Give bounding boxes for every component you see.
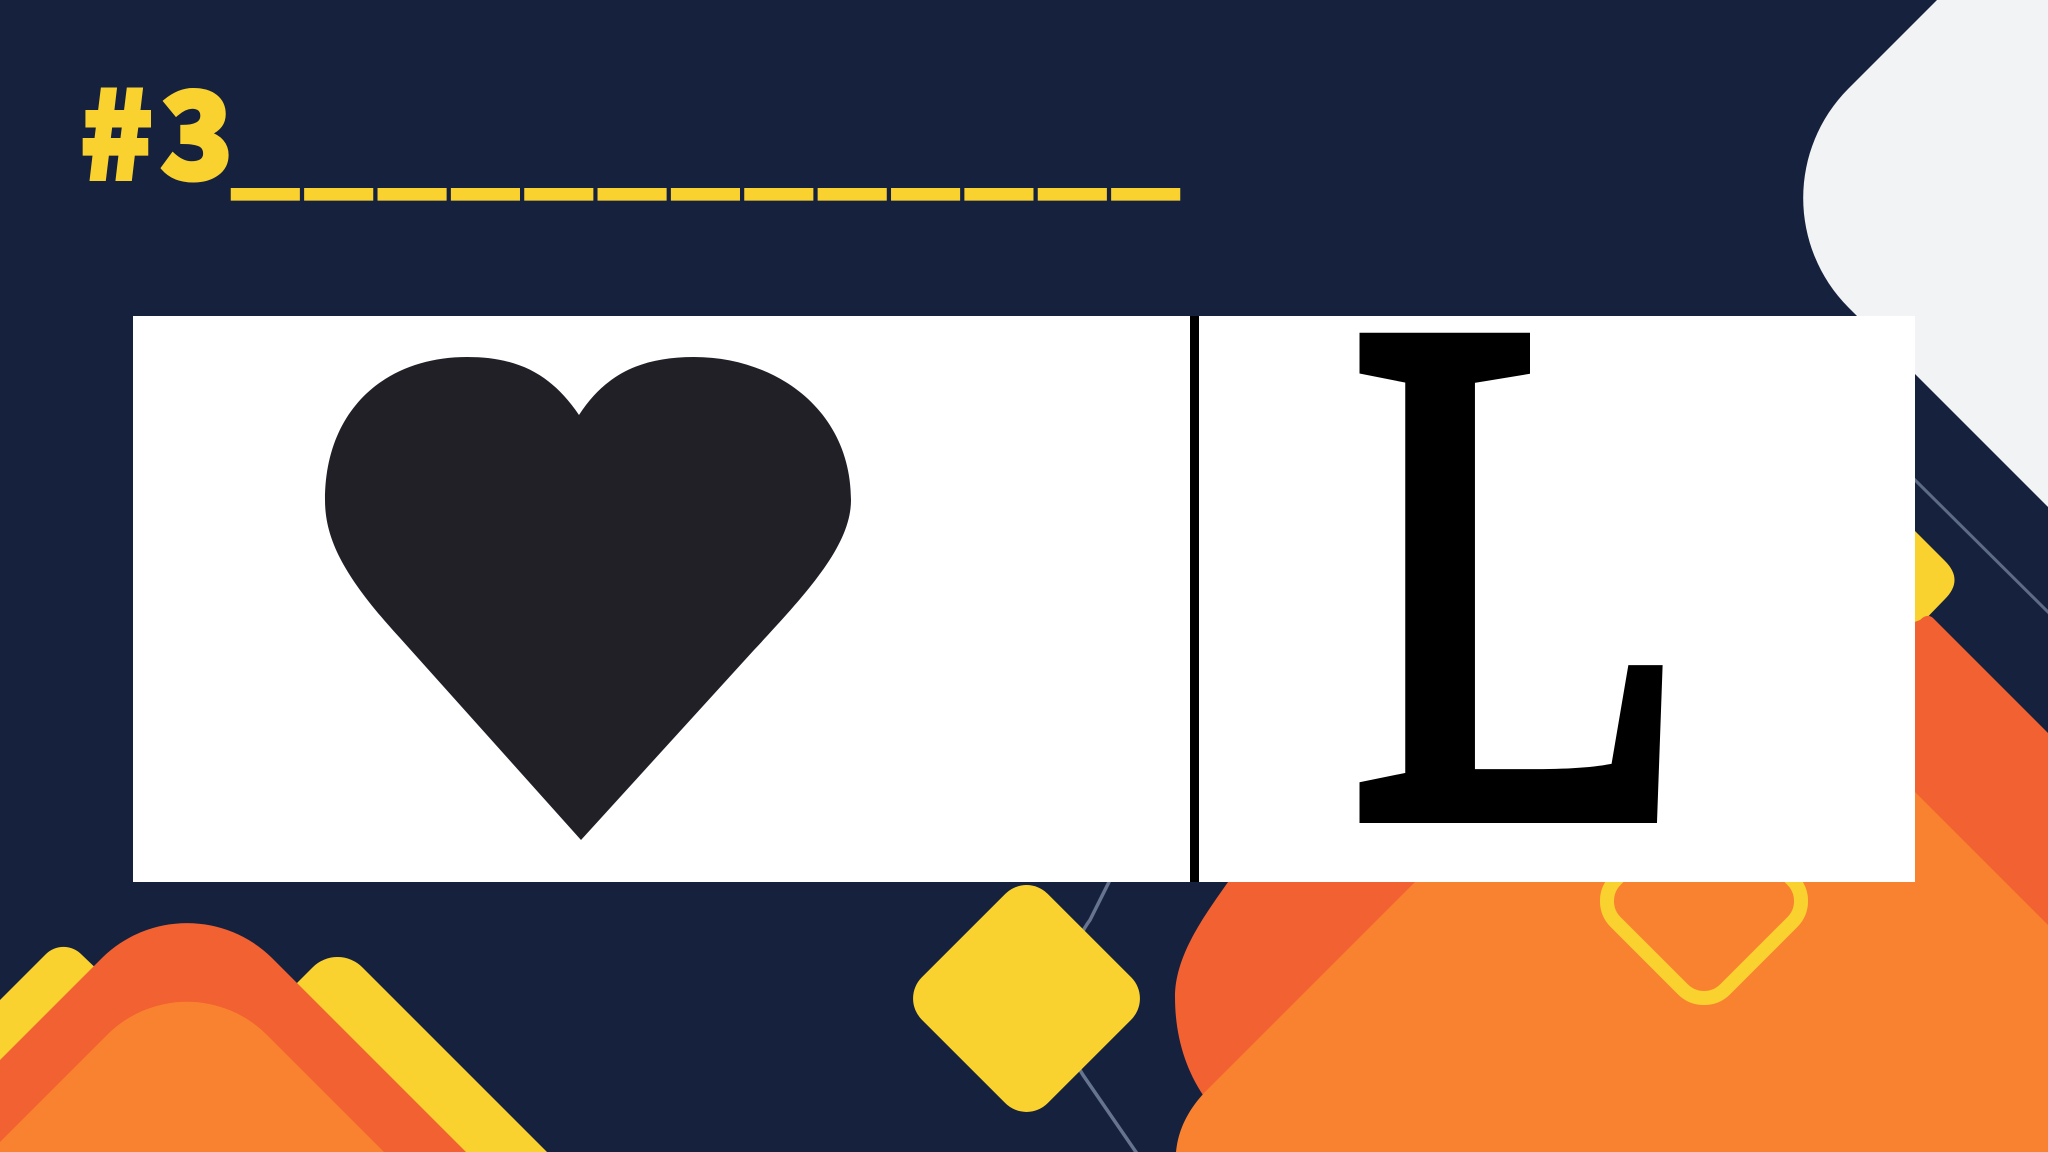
bottom left mountain group bbox=[0, 923, 547, 1152]
left yellow peak bbox=[0, 947, 150, 1152]
yellow filled diamond bbox=[901, 873, 1152, 1124]
icon: heart bbox=[325, 357, 851, 840]
red-orange peak bbox=[0, 923, 466, 1152]
title: #3 with blank underline bbox=[80, 33, 1182, 217]
orange peak bbox=[0, 1002, 384, 1152]
background shape: bottom right orange mass bbox=[1176, 587, 2048, 1152]
title number: #3 bbox=[80, 40, 240, 214]
letter L: L bbox=[1353, 177, 1686, 966]
yellow outlined diamond bbox=[1595, 792, 1813, 1010]
panel: image strip bbox=[133, 177, 1915, 966]
right yellow peak bbox=[250, 957, 547, 1152]
panel: letter image background bbox=[1199, 316, 1915, 882]
background line: top right thin diagonal bbox=[1912, 477, 2048, 614]
panel: heart image background bbox=[133, 316, 1190, 882]
background shape: bottom right red-orange mass bbox=[1175, 616, 2048, 1152]
background shape: right yellow diamond bbox=[1850, 496, 1954, 630]
thin curved line behind diamond bbox=[1067, 878, 1138, 1152]
divider bbox=[1190, 316, 1199, 882]
title blank underscores: _____________ bbox=[229, 33, 1182, 217]
background shape: top right light rounded diamond bbox=[1803, 0, 2048, 507]
